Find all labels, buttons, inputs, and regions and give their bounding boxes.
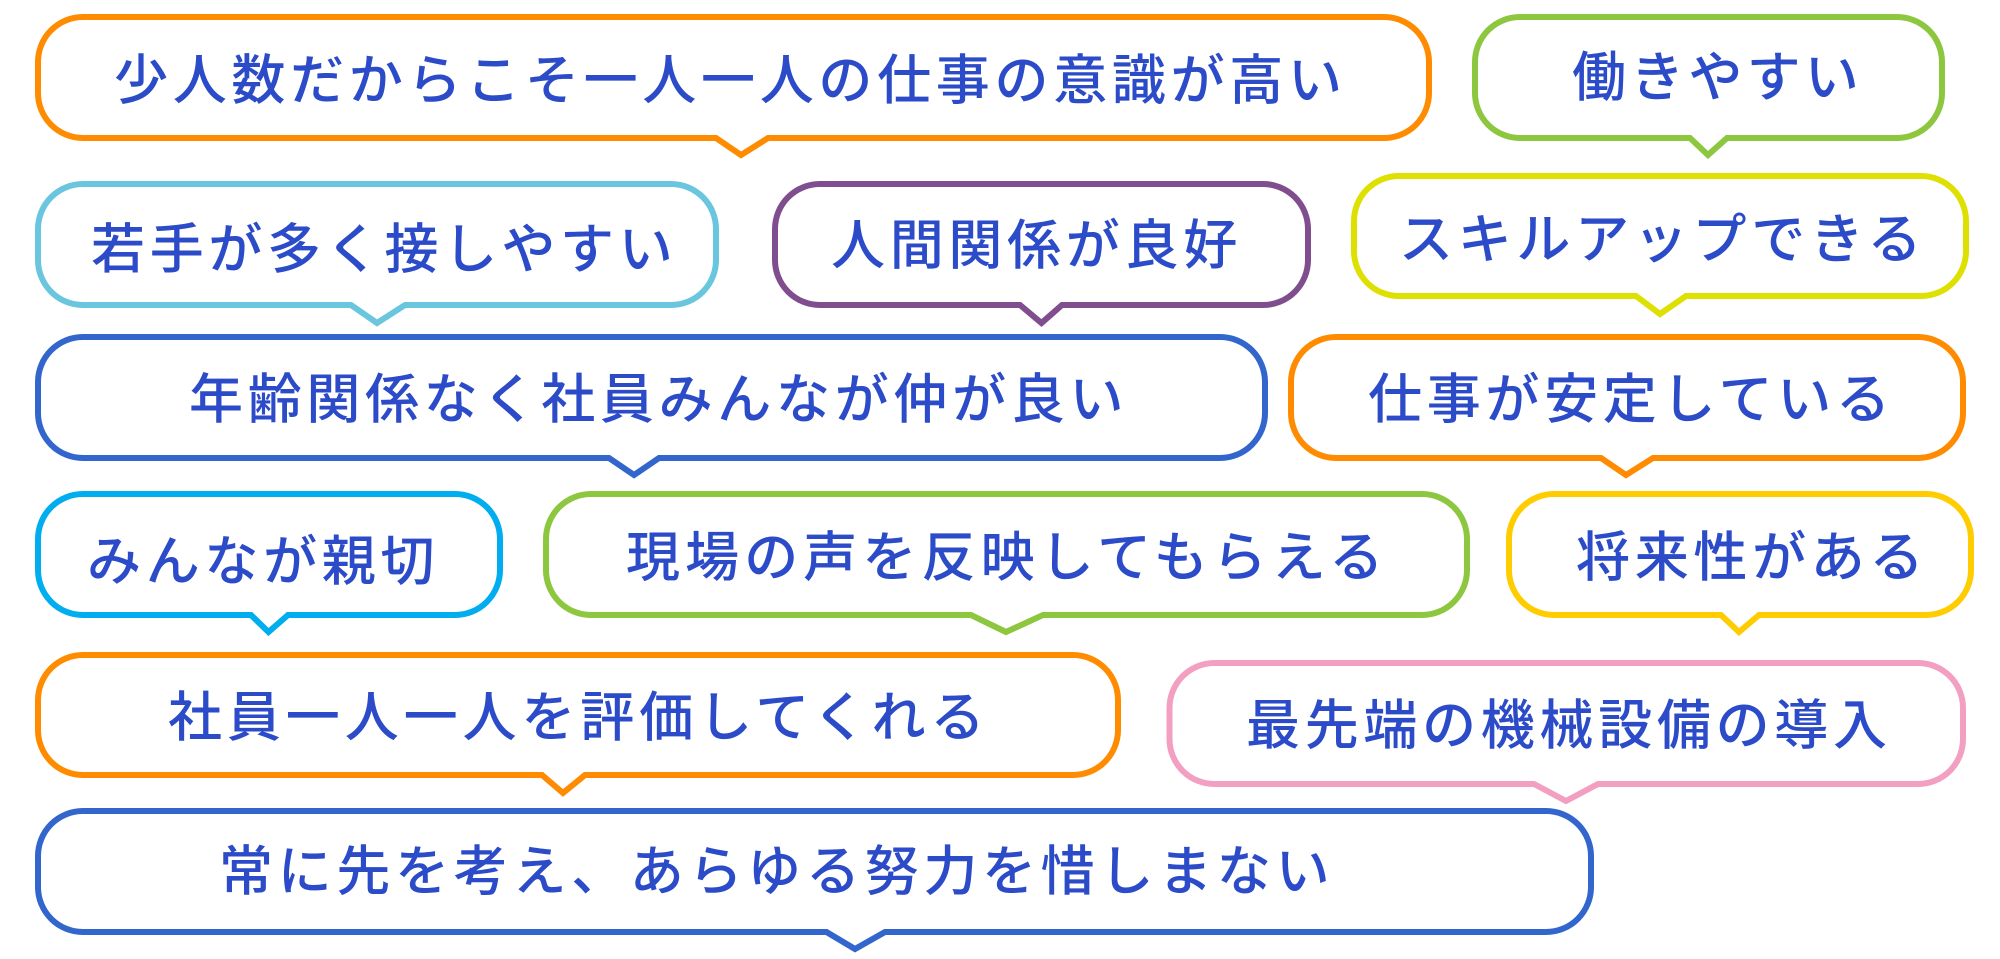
- bubble: good relationships: [775, 184, 1308, 323]
- bubble: latest equipment: 最先端の機械設備の導入: [1246, 696, 1892, 756]
- bubble: field voices reflected: 現場の声を反映してもらえる: [626, 528, 1388, 588]
- bubble: always looking ahead: [38, 811, 1591, 949]
- bubble: good relationships: 人間関係が良好: [831, 216, 1242, 276]
- bubble: skill up: [1354, 176, 1966, 314]
- bubble: many young people: [38, 184, 716, 323]
- bubble: everyone is kind: みんなが親切: [87, 532, 439, 592]
- bubble: has a future: 将来性がある: [1576, 528, 1928, 588]
- bubble: stable work: 仕事が安定している: [1368, 370, 1895, 430]
- bubble: everyone is kind: [38, 494, 500, 632]
- bubble: easy to work: [1475, 17, 1942, 155]
- bubble: everyone gets along: [38, 337, 1265, 475]
- bubble: small team awareness: [38, 17, 1429, 155]
- bubble: always looking ahead: 常に先を考え、あらゆる努力を惜しまない: [219, 842, 1334, 902]
- bubble: evaluates each employee: [38, 655, 1118, 793]
- bubble: everyone gets along: 年齢関係なく社員みんなが仲が良い: [189, 370, 1128, 430]
- bubble: field voices reflected: [546, 494, 1467, 632]
- bubble: easy to work: 働きやすい: [1572, 48, 1863, 108]
- bubble: stable work: [1291, 337, 1963, 475]
- bubble: many young people: 若手が多く接しやすい: [91, 220, 677, 280]
- bubble: latest equipment: [1170, 663, 1963, 801]
- bubble: small team awareness: 少人数だからこそ一人一人の仕事の意識が高い: [114, 51, 1347, 111]
- bubble: skill up: スキルアップできる: [1399, 210, 1926, 270]
- bubble: evaluates each employee: 社員一人一人を評価してくれる: [168, 688, 989, 748]
- bubble: has a future: [1509, 494, 1971, 632]
